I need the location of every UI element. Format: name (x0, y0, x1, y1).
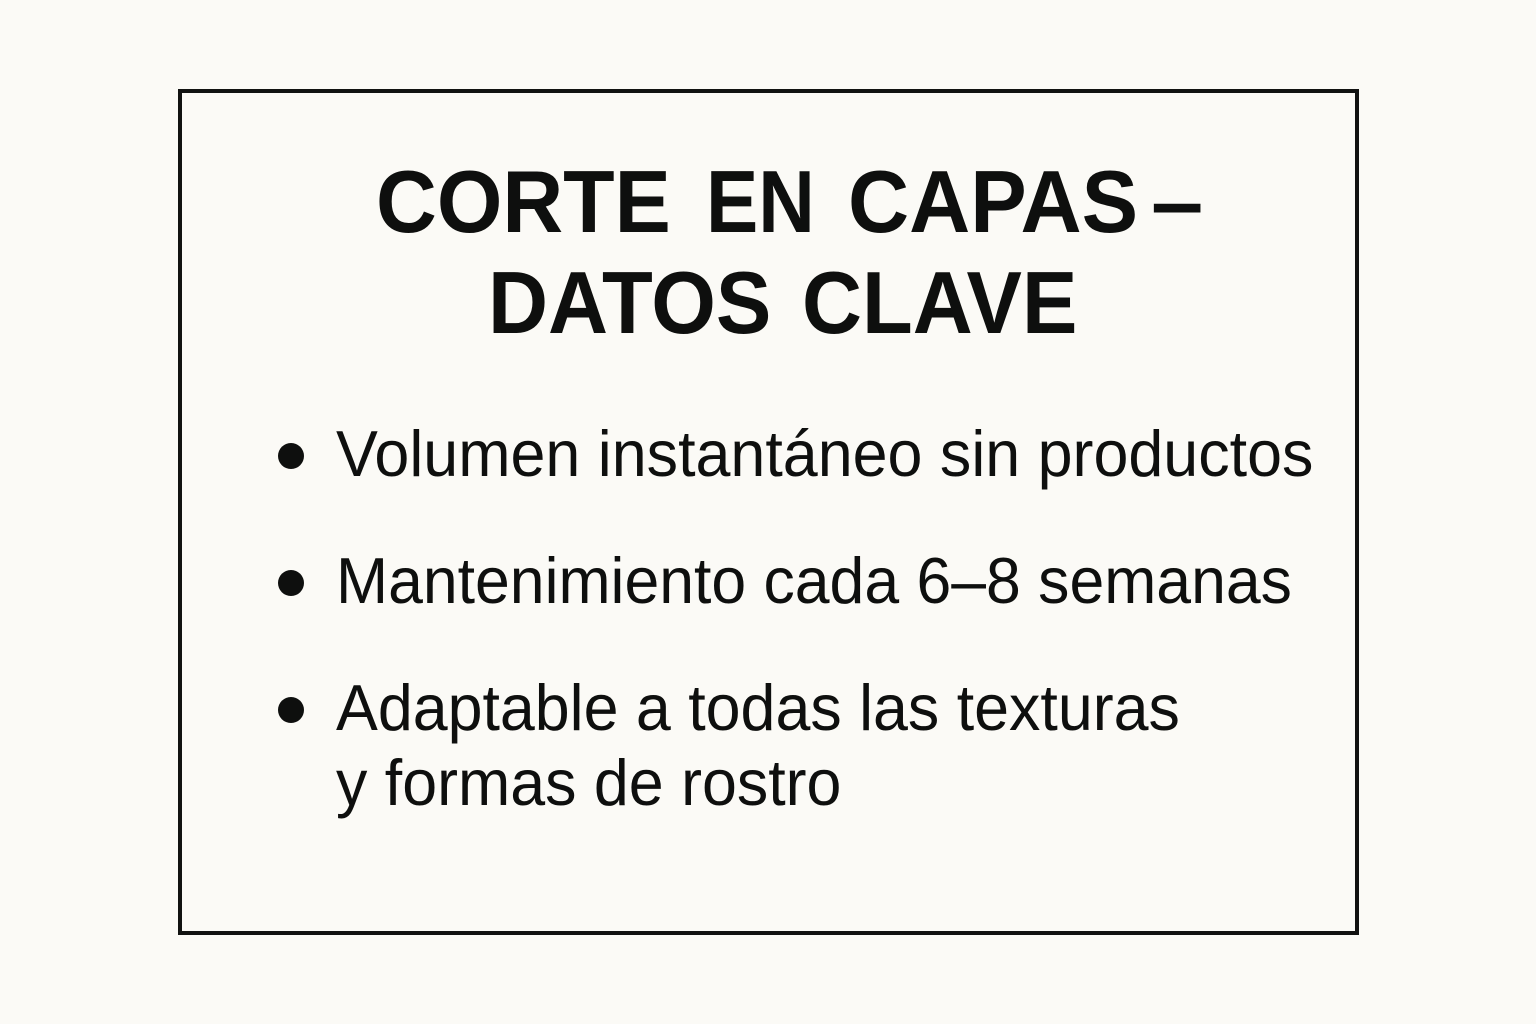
heading: line 1: – (1151, 152, 1203, 251)
bullet icon 2 (278, 570, 304, 596)
heading: line 2 (488, 253, 1077, 352)
heading: line 2: DATOS (488, 253, 771, 352)
text: bullet 3: y formas de rostro (336, 746, 841, 819)
heading: line 1: CORTE (376, 152, 670, 251)
heading: line 1: EN (706, 152, 815, 251)
text: bullet 1: Volumen instantáneo sin productos (336, 417, 1313, 490)
bullet icon 3 (278, 697, 304, 723)
text: bullet 3 (336, 671, 1180, 819)
text: bullet 2: Mantenimiento cada 6–8 semanas (336, 544, 1292, 617)
heading: line 1: CAPAS (848, 152, 1138, 251)
bullet icon 1 (278, 443, 304, 469)
heading: line 2: CLAVE (802, 253, 1077, 352)
panel: key facts frame (178, 89, 1359, 935)
heading: line 1 (376, 152, 1203, 251)
text: bullet 3: Adaptable a todas las texturas (336, 671, 1180, 744)
